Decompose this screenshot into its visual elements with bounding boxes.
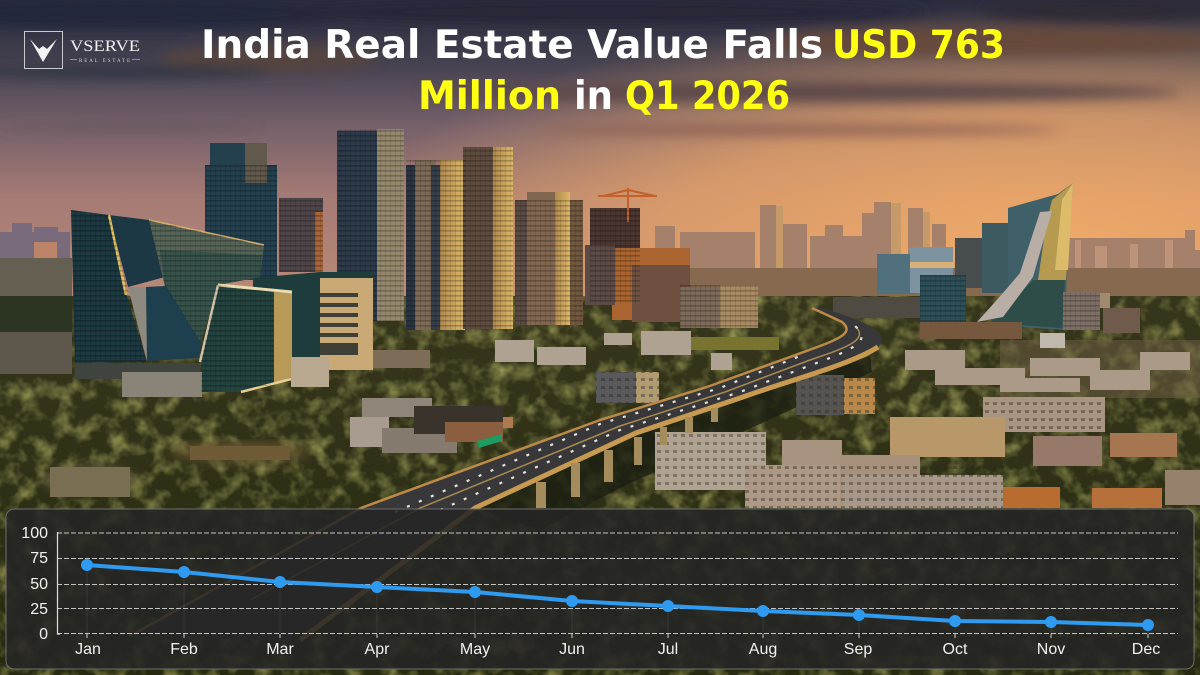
- line chart: monthly value decline: 25: [30, 601, 48, 618]
- chart panel: [6, 509, 1194, 669]
- right glass tower cluster: [833, 183, 1140, 348]
- line chart: monthly value decline: [21, 525, 1178, 658]
- line chart: monthly value decline: Jul: [658, 641, 678, 658]
- title: in: [574, 74, 613, 119]
- line chart: monthly value decline: Feb: [170, 641, 198, 658]
- line chart: monthly value decline: Apr: [365, 641, 390, 658]
- line chart: monthly value decline: 100: [21, 525, 48, 542]
- line chart: monthly value decline: Sep: [844, 641, 872, 658]
- line chart: monthly value decline: Oct: [943, 641, 968, 658]
- low-rise buildings: [50, 331, 1200, 508]
- title: [201, 23, 1005, 119]
- title: Q1 2026: [625, 74, 790, 119]
- line chart: monthly value decline: Jun: [559, 641, 585, 658]
- elevated highway: [130, 308, 882, 640]
- title: India Real Estate Value Falls: [201, 23, 823, 68]
- logo: Vserve Real Estate: VSERVE: [70, 38, 140, 55]
- left glass office complex: [71, 210, 373, 397]
- line chart: monthly value decline: May: [460, 641, 490, 658]
- logo: Vserve Real Estate: REAL ESTATE: [79, 59, 130, 64]
- logo: Vserve Real Estate: [24, 32, 140, 68]
- towers: central high-rises: [205, 129, 583, 330]
- distant skyline: [0, 202, 1200, 282]
- line chart: monthly value decline: 50: [30, 576, 48, 593]
- title: Million: [418, 74, 561, 119]
- background: ground and vegetation: [0, 258, 1200, 675]
- line chart: monthly value decline: Nov: [1037, 641, 1065, 658]
- line chart: monthly value decline: Dec: [1132, 641, 1160, 658]
- line chart: monthly value decline: Jan: [75, 641, 101, 658]
- line chart: monthly value decline: 0: [39, 626, 48, 643]
- line chart: monthly value decline: Mar: [266, 641, 294, 658]
- line chart: monthly value decline: Aug: [749, 641, 777, 658]
- construction site with crane: [585, 188, 758, 328]
- line chart: monthly value decline: 75: [30, 550, 48, 567]
- background: sunset sky: [0, 0, 1200, 300]
- title: USD 763: [832, 23, 1005, 68]
